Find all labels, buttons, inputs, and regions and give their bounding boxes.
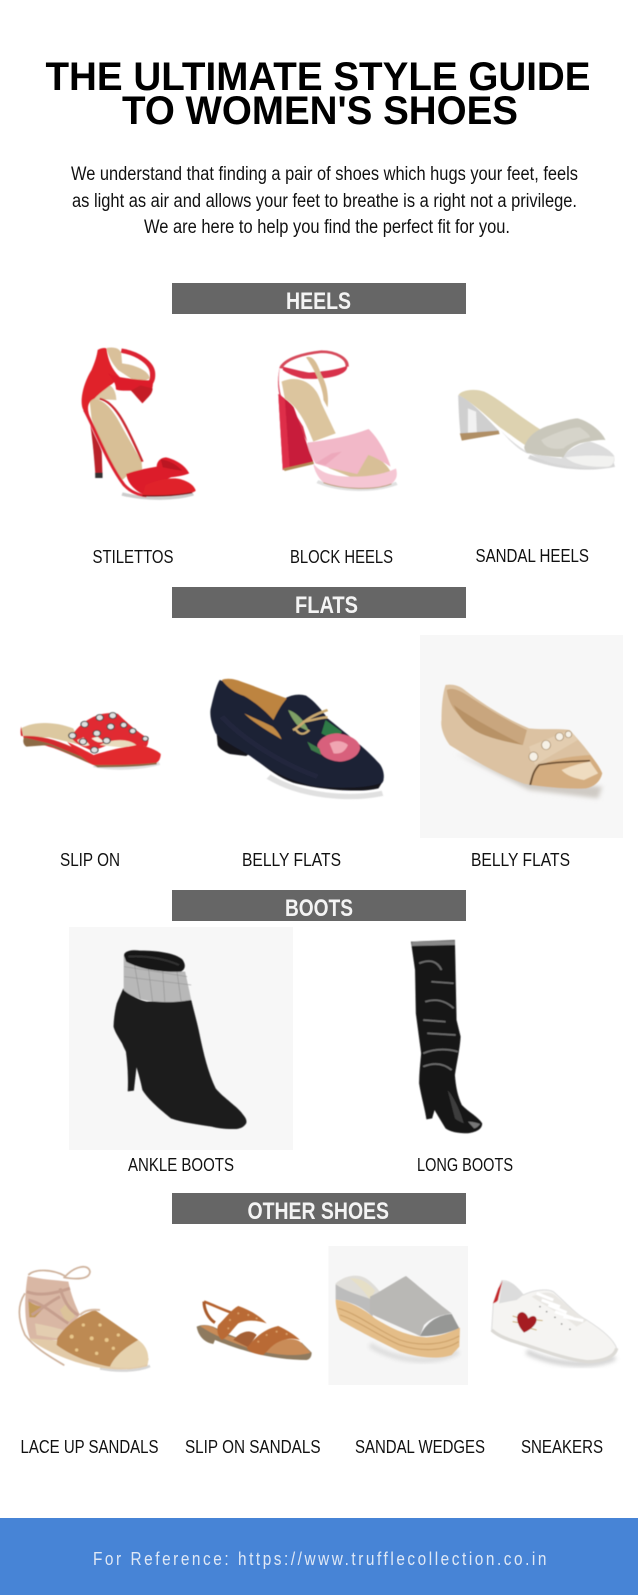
label: stilettos: STILETTOS	[92, 546, 174, 567]
shoe: sandal wedges	[336, 1276, 460, 1360]
intro paragraph	[71, 164, 578, 238]
panel: metallic flat background	[420, 635, 623, 838]
shoe: ankle boots	[114, 950, 246, 1129]
label: block heels: BLOCK HEELS	[290, 546, 393, 567]
label: belly flats: BELLY FLATS	[242, 849, 341, 870]
shoe: stilettos	[82, 348, 196, 498]
section heading: other shoes: OTHER SHOES	[248, 1198, 389, 1225]
label: lace up sandals: LACE UP SANDALS	[20, 1436, 158, 1457]
label: slip on sandals: SLIP ON SANDALS	[185, 1436, 320, 1457]
label: sneakers: SNEAKERS	[521, 1436, 603, 1457]
panel: ankle boot background	[69, 927, 293, 1150]
section heading: heels	[172, 283, 466, 315]
title	[46, 55, 590, 133]
section heading: boots: BOOTS	[285, 895, 353, 922]
title: TO WOMEN'S SHOES	[122, 89, 518, 133]
shoe: sneakers	[492, 1281, 617, 1364]
shoe: slip on sandals	[197, 1302, 312, 1360]
section heading: flats: FLATS	[295, 592, 358, 619]
title: THE ULTIMATE STYLE GUIDE	[46, 55, 590, 99]
shoe: long boots	[411, 940, 482, 1133]
section heading: heels: HEELS	[286, 288, 351, 315]
label: ankle boots: ANKLE BOOTS	[128, 1154, 234, 1175]
label: long boots: LONG BOOTS	[417, 1154, 513, 1175]
section heading: flats	[172, 587, 466, 619]
footer band: For Reference: https://www.trufflecollection.co.in	[93, 1549, 549, 1569]
label: sandal heels: SANDAL HEELS	[476, 545, 589, 566]
section heading: boots	[172, 890, 466, 922]
shoe: belly flats metallic	[441, 685, 602, 798]
label: slip on: SLIP ON	[60, 849, 120, 870]
shoe: sandal heels	[458, 390, 615, 468]
intro paragraph: as light as air and allows your feet to breathe is a right not a privilege.	[72, 191, 577, 212]
label: belly flats metallic: BELLY FLATS	[471, 849, 570, 870]
panel: sandal wedge background	[328, 1246, 468, 1385]
label: sandal wedges: SANDAL WEDGES	[355, 1436, 485, 1457]
shoe: lace up sandals	[19, 1267, 150, 1371]
shoe: slip on	[21, 713, 161, 768]
section heading: other shoes	[172, 1193, 466, 1225]
intro paragraph: We are here to help you find the perfect fit for you.	[144, 217, 510, 238]
footer band	[0, 1518, 638, 1595]
shoe: belly flats loafer	[210, 679, 384, 796]
shoe: block heels	[278, 352, 397, 489]
